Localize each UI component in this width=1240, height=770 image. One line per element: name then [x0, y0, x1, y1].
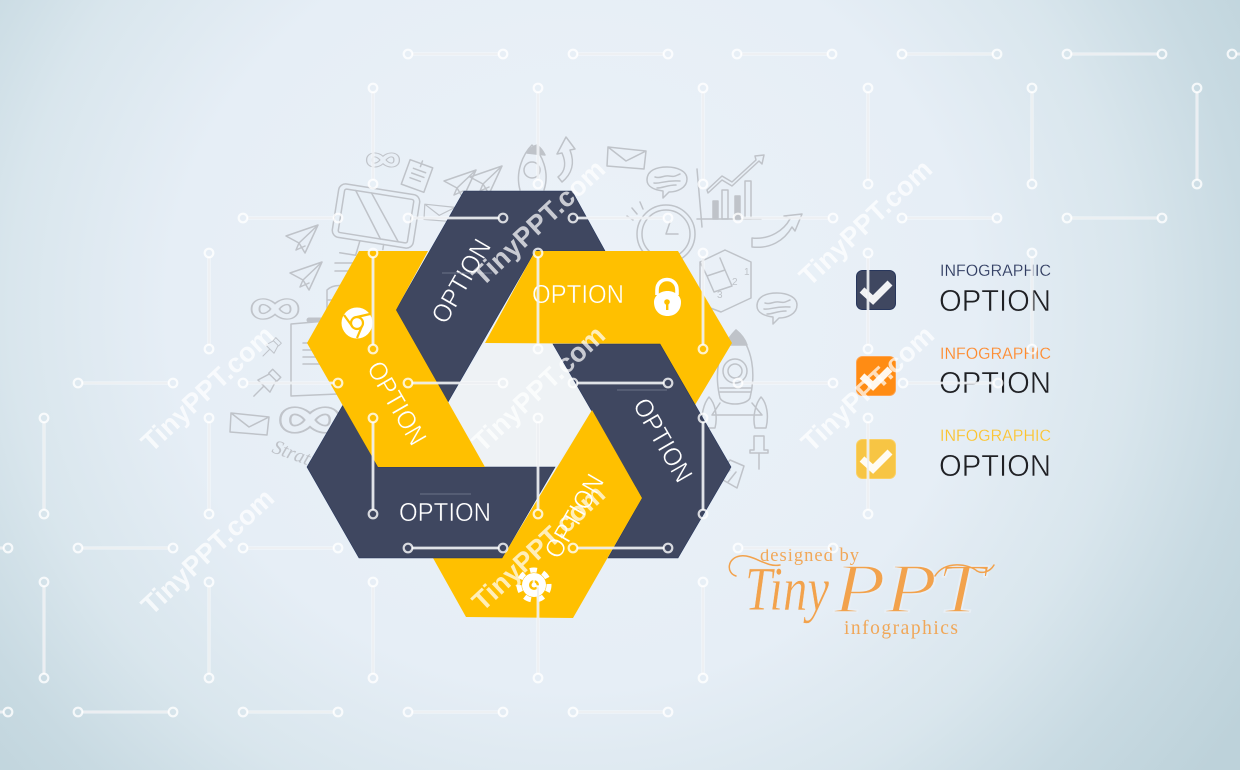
doodle: swoosh arrow	[752, 214, 802, 247]
legend row 1: navy checkbox	[856, 270, 896, 310]
watermark 7: TinyPPT.com	[135, 483, 280, 621]
segment: navy right	[553, 344, 731, 558]
panel: interlocked hexagon ring	[307, 191, 732, 618]
doodle: plane left 1	[286, 225, 318, 253]
doodle: infinity left	[256, 302, 294, 316]
legend row 2: orange checkbox	[856, 356, 896, 396]
segment: yellow top right	[485, 251, 732, 405]
doodle: pin 1	[259, 336, 283, 360]
label: option navy right: OPTION	[627, 393, 699, 487]
doodle: paper planes top	[444, 166, 502, 198]
watermark 4: TinyPPT.com	[793, 154, 938, 292]
doodle: curved arrow	[557, 137, 575, 182]
watermark 2: TinyPPT.com	[466, 320, 611, 458]
doodle: pin 2	[248, 367, 283, 402]
doodle: speech bubble right	[757, 293, 797, 324]
logo: designed by TinyPPT infographics	[729, 546, 994, 639]
icon: chrome	[342, 308, 372, 338]
logo wordmark: Tiny	[745, 556, 829, 624]
watermark 6: TinyPPT.com	[135, 320, 280, 458]
doodle: small infinity	[369, 155, 397, 165]
icon: gear	[519, 570, 549, 600]
doodle: large rocket	[712, 330, 762, 415]
doodle: side rocket left	[702, 397, 716, 428]
legend row 3 option: OPTION	[939, 448, 1051, 483]
legend row 3: yellow checkbox	[856, 440, 896, 478]
label: option navy top: OPTION	[425, 234, 497, 328]
legend row 1 heading: INFOGRAPHIC	[940, 262, 1051, 280]
doodle: envelope partial	[424, 204, 455, 222]
segment: yellow bottom	[433, 410, 642, 618]
watermark 1: TinyPPT.com	[466, 154, 611, 292]
doodle: handwritten word: Strategy	[269, 436, 340, 480]
doodle: numbered stairs: 1	[744, 267, 750, 278]
doodle illustration background	[230, 137, 802, 488]
doodle: push pin	[750, 436, 768, 469]
segment: yellow left	[307, 251, 485, 467]
doodle: plane left 2	[290, 262, 322, 290]
segment: navy top	[396, 191, 605, 402]
label: option left: OPTION	[361, 356, 433, 450]
hexagon centre	[448, 343, 592, 467]
doodle: numbered stairs	[700, 250, 751, 312]
doodle: monitor	[329, 183, 421, 264]
doodle: mouse shape	[327, 263, 363, 314]
doodle: top rocket	[518, 145, 546, 190]
logo line: designed by: designed by	[760, 546, 860, 566]
doodle: infinity lower	[285, 411, 335, 429]
segment: navy bottom left	[307, 405, 555, 558]
doodle: numbered stairs: 3	[717, 290, 723, 301]
doodle: clock	[627, 202, 695, 263]
doodle: growth chart	[697, 155, 764, 227]
watermarks	[135, 154, 940, 621]
legend	[856, 262, 1051, 483]
legend row 3 heading: INFOGRAPHIC	[940, 427, 1051, 445]
legend row 1 option: OPTION	[939, 283, 1051, 318]
icon: padlock	[654, 280, 681, 316]
doodle: numbered stairs: 2	[732, 277, 738, 288]
doodle: envelope top	[607, 147, 646, 169]
logo wordmark second word: PPT	[833, 551, 990, 628]
doodle: side rocket right	[754, 397, 767, 428]
doodle: speech bubble top	[647, 167, 687, 198]
watermark 3: TinyPPT.com	[466, 479, 611, 617]
doodle: note	[401, 157, 434, 192]
label: option yellow bottom: OPTION	[538, 469, 610, 563]
doodle: envelope lower	[230, 413, 269, 435]
logo line: infographics: infographics	[844, 618, 958, 639]
doodle: clipboard	[291, 320, 338, 396]
watermark 5: TinyPPT.com	[795, 320, 940, 458]
legend row 2 heading: INFOGRAPHIC	[940, 345, 1051, 363]
doodle: box	[716, 460, 744, 488]
legend row 2 option: OPTION	[939, 365, 1051, 400]
label: option top right: OPTION	[532, 279, 624, 309]
label: option navy bottom: OPTION	[399, 497, 491, 527]
logo swashes	[729, 556, 994, 576]
